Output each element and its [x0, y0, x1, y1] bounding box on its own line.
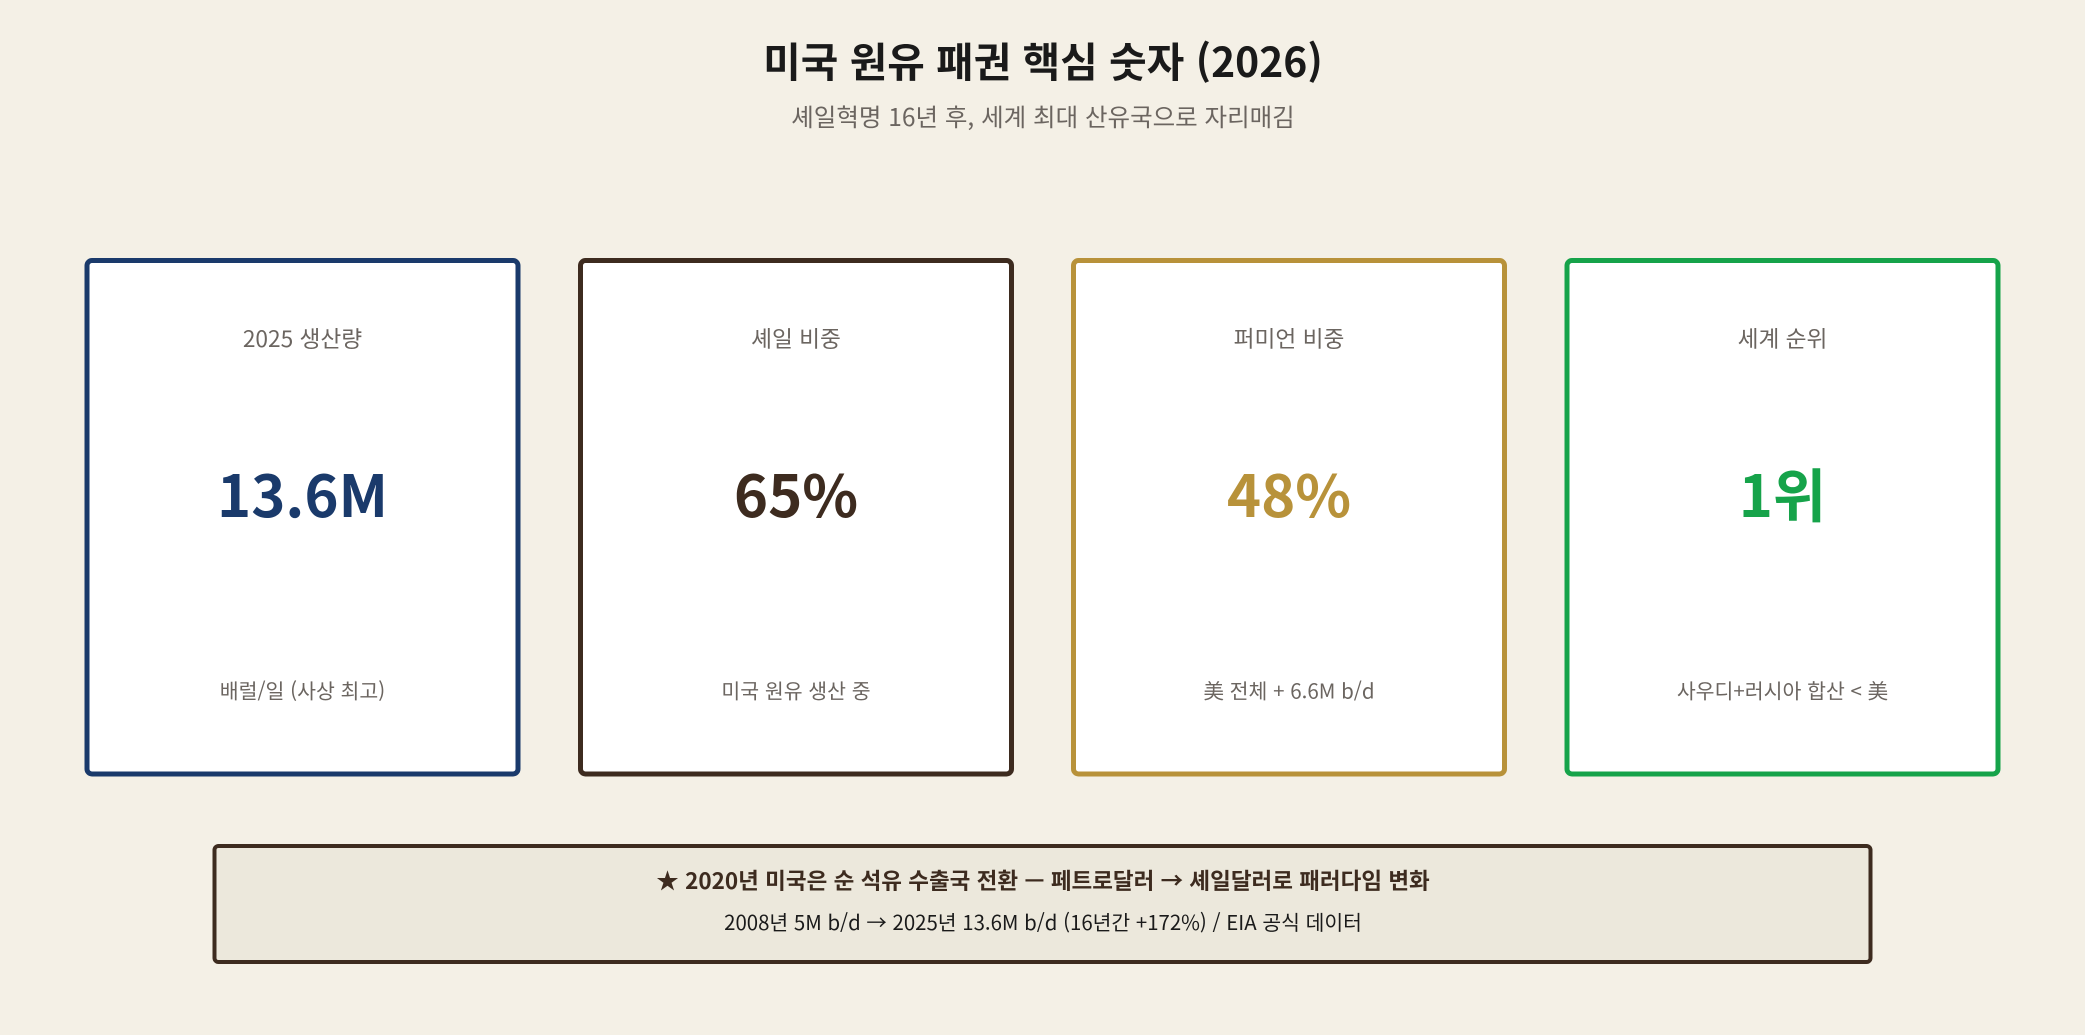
- card label: 2025 생산량: [243, 321, 362, 354]
- card frame: [1074, 260, 1504, 774]
- card note: 美 전체 + 6.6M b/d: [1203, 674, 1375, 704]
- card note: 미국 원유 생산 중: [721, 674, 871, 704]
- big number: 1위: [1739, 450, 1826, 534]
- card frame: [580, 260, 1012, 774]
- big number: 13.6M: [217, 450, 388, 534]
- title: 미국 원유 패권 핵심 숫자 (2026): [763, 30, 1323, 89]
- panel: shale share: [580, 260, 1012, 774]
- card frame: [87, 260, 518, 774]
- card frame: [1567, 260, 1998, 774]
- callout: [214, 846, 1870, 962]
- big number: 48%: [1227, 450, 1351, 534]
- panel: world rank: [1567, 260, 1998, 774]
- card label: 셰일 비중: [751, 321, 841, 354]
- card note: 배럴/일 (사상 최고): [220, 674, 385, 704]
- panel: 2025 production: [87, 260, 518, 774]
- card label: 퍼미언 비중: [1234, 321, 1344, 354]
- callout detail: 2008년 5M b/d → 2025년 13.6M b/d (16년간 +172%) / EIA 공식 데이터: [724, 906, 1362, 936]
- callout box: [214, 846, 1870, 962]
- card label: 세계 순위: [1738, 321, 1827, 354]
- big number: 65%: [734, 450, 858, 534]
- card note: 사우디+러시아 합산 < 美: [1677, 674, 1888, 704]
- callout headline: ★ 2020년 미국은 순 석유 수출국 전환 — 페트로달러 → 셰일달러로 패러다임 변화: [656, 864, 1430, 896]
- panel: permian share: [1074, 260, 1504, 774]
- subtitle: 셰일혁명 16년 후, 세계 최대 산유국으로 자리매김: [791, 99, 1295, 134]
